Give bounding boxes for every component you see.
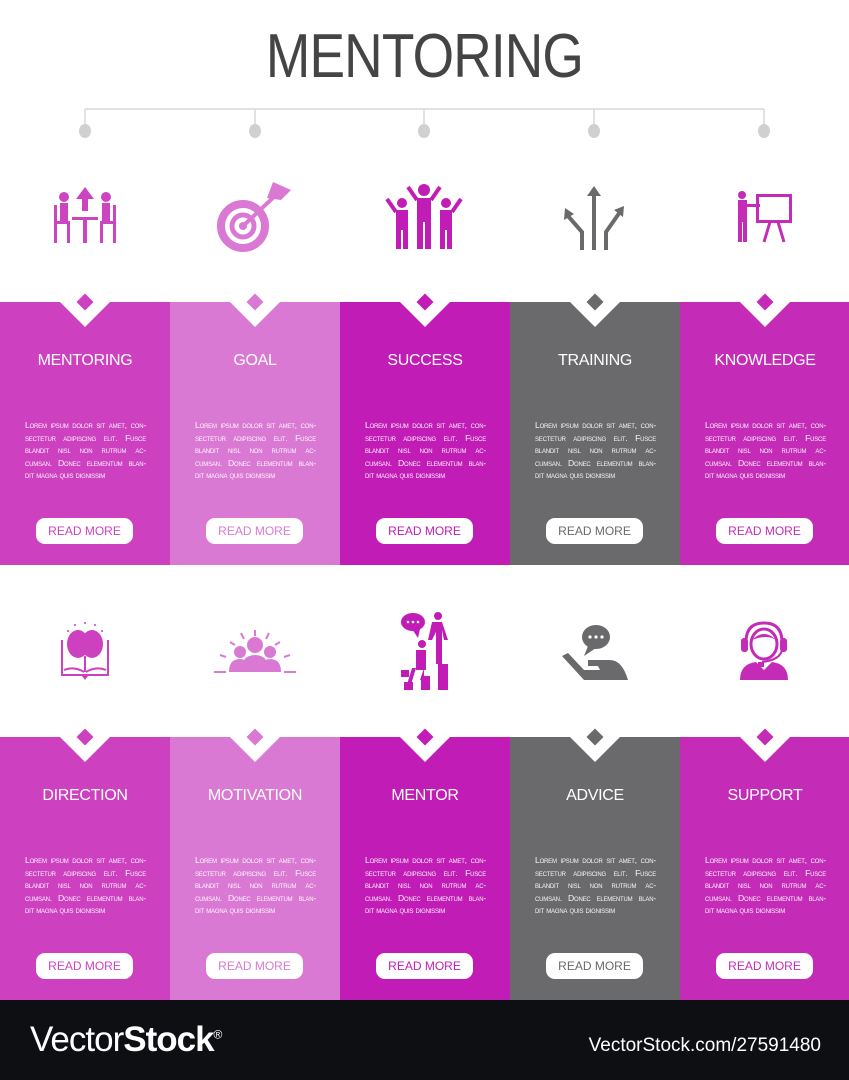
panel: advice: cumsan. Donec elementum blan- <box>535 892 656 902</box>
panel: knowledge: blandit nisl non rutrum ac- <box>705 445 826 455</box>
panel: mentoring: Lorem ipsum dolor sit amet, con- <box>25 420 146 430</box>
icon: support headset <box>740 622 788 680</box>
panel: training: cumsan. Donec elementum blan- <box>535 458 656 468</box>
panel: success: sectetur adipiscing elit. Fusce <box>365 432 486 442</box>
panel: support: cumsan. Donec elementum blan- <box>705 892 826 902</box>
panel: knowledge <box>680 302 849 565</box>
panel: mentoring <box>0 302 170 565</box>
panel: motivation: sectetur adipiscing elit. Fusce <box>195 868 316 878</box>
panel: advice: blandit nisl non rutrum ac- <box>535 880 656 890</box>
panel: advice: ADVICE <box>566 787 624 804</box>
panel: success: READ MORE <box>388 524 461 538</box>
panel: training: dit magna quis dignissim <box>535 470 615 480</box>
icon: paths arrows <box>564 186 624 250</box>
panel: advice: READ MORE <box>558 959 631 973</box>
panel: direction: sectetur adipiscing elit. Fusce <box>25 868 146 878</box>
panel: motivation: READ MORE <box>218 959 291 973</box>
title: MENTORING <box>266 22 583 91</box>
panel: goal: Lorem ipsum dolor sit amet, con- <box>195 420 316 430</box>
panel: mentoring: dit magna quis dignissim <box>25 470 105 480</box>
panel: success: blandit nisl non rutrum ac- <box>365 445 486 455</box>
panel: mentor: blandit nisl non rutrum ac- <box>365 880 486 890</box>
connector lines <box>79 108 770 138</box>
panel: support: SUPPORT <box>728 787 802 804</box>
icon: target <box>217 182 291 252</box>
panel: mentor: cumsan. Donec elementum blan- <box>365 892 486 902</box>
panel: mentoring: MENTORING <box>38 352 132 369</box>
panel: direction: Lorem ipsum dolor sit amet, con- <box>25 855 146 865</box>
icon: motivation team <box>214 630 296 673</box>
panel: training: TRAINING <box>558 352 632 369</box>
panel: success: cumsan. Donec elementum blan- <box>365 458 486 468</box>
panel: motivation: Lorem ipsum dolor sit amet, con- <box>195 855 316 865</box>
panel: direction: cumsan. Donec elementum blan- <box>25 892 146 902</box>
panel: support <box>680 737 849 1000</box>
footer <box>0 1000 849 1080</box>
panel: mentoring: cumsan. Donec elementum blan- <box>25 458 146 468</box>
panel: mentor: READ MORE <box>388 959 461 973</box>
icon: mentor <box>401 612 448 690</box>
panel: support: dit magna quis dignissim <box>705 905 785 915</box>
panel: support: sectetur adipiscing elit. Fusce <box>705 868 826 878</box>
panel: direction: blandit nisl non rutrum ac- <box>25 880 146 890</box>
panel: advice: sectetur adipiscing elit. Fusce <box>535 868 656 878</box>
panel: knowledge: Lorem ipsum dolor sit amet, con- <box>705 420 826 430</box>
panel: mentor <box>340 737 510 1000</box>
panel: advice: dit magna quis dignissim <box>535 905 615 915</box>
panel: motivation: dit magna quis dignissim <box>195 905 275 915</box>
panel: goal: cumsan. Donec elementum blan- <box>195 458 316 468</box>
icon: presentation <box>738 191 792 242</box>
panel: mentor: MENTOR <box>391 787 459 804</box>
panel: goal: sectetur adipiscing elit. Fusce <box>195 432 316 442</box>
panel: motivation <box>170 737 340 1000</box>
panel: advice <box>510 737 680 1000</box>
panel: mentoring: READ MORE <box>48 524 121 538</box>
panel: goal: GOAL <box>233 352 277 369</box>
panel: mentoring: sectetur adipiscing elit. Fusce <box>25 432 146 442</box>
panel: motivation: cumsan. Donec elementum blan- <box>195 892 316 902</box>
panel: knowledge: READ MORE <box>728 524 801 538</box>
panel: direction <box>0 737 170 1000</box>
panel: success: Lorem ipsum dolor sit amet, con- <box>365 420 486 430</box>
panel: goal: blandit nisl non rutrum ac- <box>195 445 316 455</box>
panel: success: dit magna quis dignissim <box>365 470 445 480</box>
icon: success people <box>385 184 463 249</box>
panel: direction: READ MORE <box>48 959 121 973</box>
panel: support: blandit nisl non rutrum ac- <box>705 880 826 890</box>
panel: goal: dit magna quis dignissim <box>195 470 275 480</box>
panel: training: Lorem ipsum dolor sit amet, con- <box>535 420 656 430</box>
panel: knowledge: cumsan. Donec elementum blan- <box>705 458 826 468</box>
panel: mentoring: blandit nisl non rutrum ac- <box>25 445 146 455</box>
icon: brain book <box>61 622 109 680</box>
panel: support: Lorem ipsum dolor sit amet, con- <box>705 855 826 865</box>
panel: training: sectetur adipiscing elit. Fusce <box>535 432 656 442</box>
panel: advice: Lorem ipsum dolor sit amet, con- <box>535 855 656 865</box>
footer logo: VectorStock® <box>30 1020 221 1059</box>
footer url: VectorStock.com/27591480 <box>589 1035 821 1056</box>
panel: direction: dit magna quis dignissim <box>25 905 105 915</box>
icon: meeting <box>54 187 116 243</box>
panel: success <box>340 302 510 565</box>
panel: training: blandit nisl non rutrum ac- <box>535 445 656 455</box>
panel: goal: READ MORE <box>218 524 291 538</box>
panel: knowledge: sectetur adipiscing elit. Fusce <box>705 432 826 442</box>
panel: knowledge: KNOWLEDGE <box>714 352 816 369</box>
panel: success: SUCCESS <box>387 352 463 369</box>
panel: goal <box>170 302 340 565</box>
panel: knowledge: dit magna quis dignissim <box>705 470 785 480</box>
panel: mentor: Lorem ipsum dolor sit amet, con- <box>365 855 486 865</box>
panel: training: READ MORE <box>558 524 631 538</box>
panel: motivation: MOTIVATION <box>208 787 302 804</box>
panel: direction: DIRECTION <box>42 787 128 804</box>
panel: motivation: blandit nisl non rutrum ac- <box>195 880 316 890</box>
icon: advice hand <box>562 625 628 680</box>
panel: mentor: dit magna quis dignissim <box>365 905 445 915</box>
panel: training <box>510 302 680 565</box>
panel: support: READ MORE <box>728 959 801 973</box>
panel: mentor: sectetur adipiscing elit. Fusce <box>365 868 486 878</box>
